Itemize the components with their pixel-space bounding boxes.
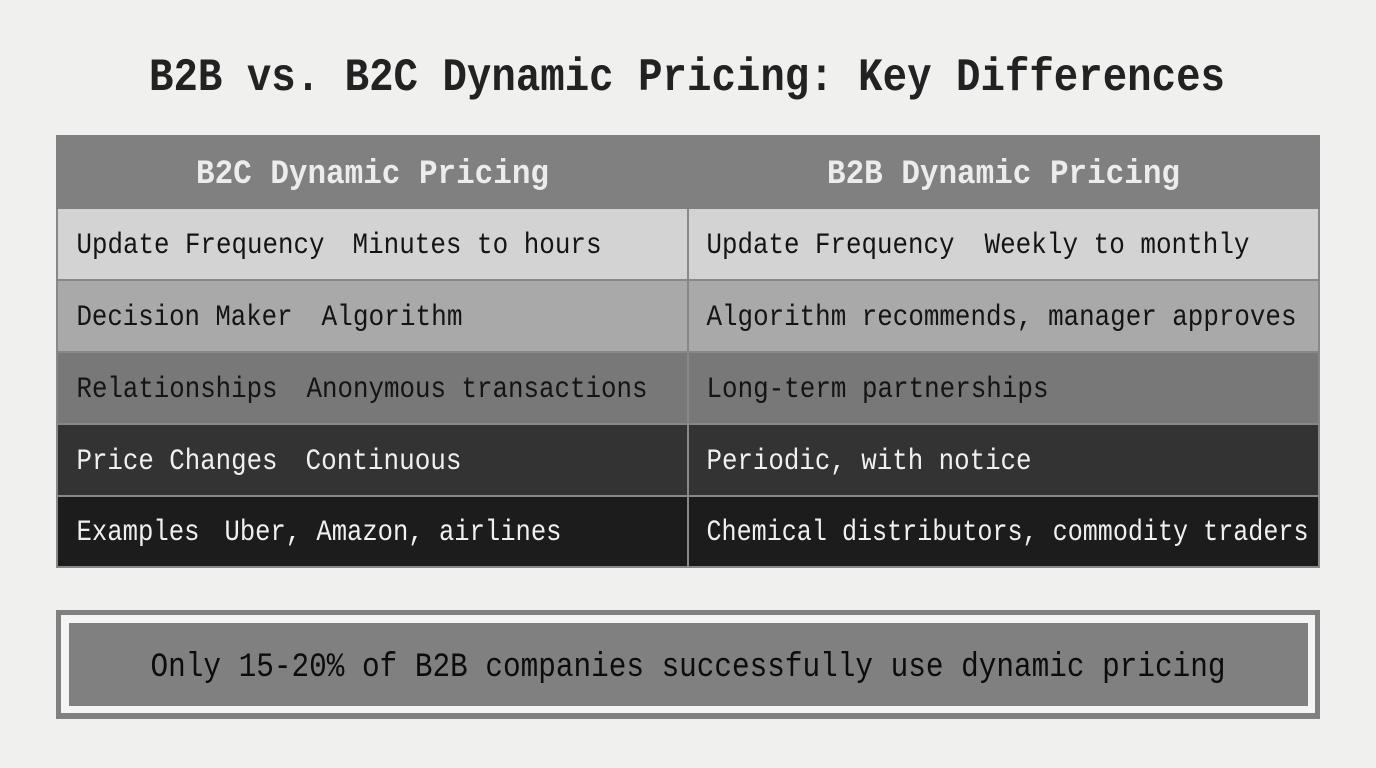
row: examples [58, 497, 1318, 566]
row: decision maker [58, 281, 1318, 351]
row: relationships: Relationships [76, 373, 278, 407]
row: examples: Examples [76, 516, 200, 550]
row: relationships: Anonymous transactions [306, 373, 648, 407]
row: update frequency [58, 209, 1318, 279]
table header row [56, 135, 1320, 209]
callout [56, 610, 1320, 719]
row: update frequency: Update Frequency [706, 229, 954, 263]
column heading: B2B: B2B Dynamic Pricing [827, 156, 1180, 194]
row: relationships: Long-term partnerships [706, 373, 1048, 407]
row: update frequency: Update Frequency [76, 229, 324, 263]
row: decision maker: Decision Maker [76, 301, 292, 335]
row: price changes: Continuous [306, 445, 462, 479]
row: examples: Uber, Amazon, airlines [224, 516, 562, 550]
row: price changes: Price Changes [76, 445, 278, 479]
comparison table [56, 135, 1320, 568]
row: update frequency: Weekly to monthly [984, 229, 1250, 263]
row: decision maker: Algorithm recommends, manager approves [706, 301, 1296, 335]
row: decision maker: Algorithm [322, 301, 462, 335]
callout: Only 15-20% of B2B companies successfully use dynamic pricing [150, 649, 1226, 687]
row: price changes: Periodic, with notice [706, 445, 1032, 479]
row: price changes [58, 425, 1318, 495]
column heading: B2C: B2C Dynamic Pricing [196, 156, 549, 194]
row: relationships [58, 353, 1318, 423]
row: update frequency: Minutes to hours [352, 229, 602, 263]
title: B2B vs. B2C Dynamic Pricing: Key Differences [149, 52, 1225, 104]
